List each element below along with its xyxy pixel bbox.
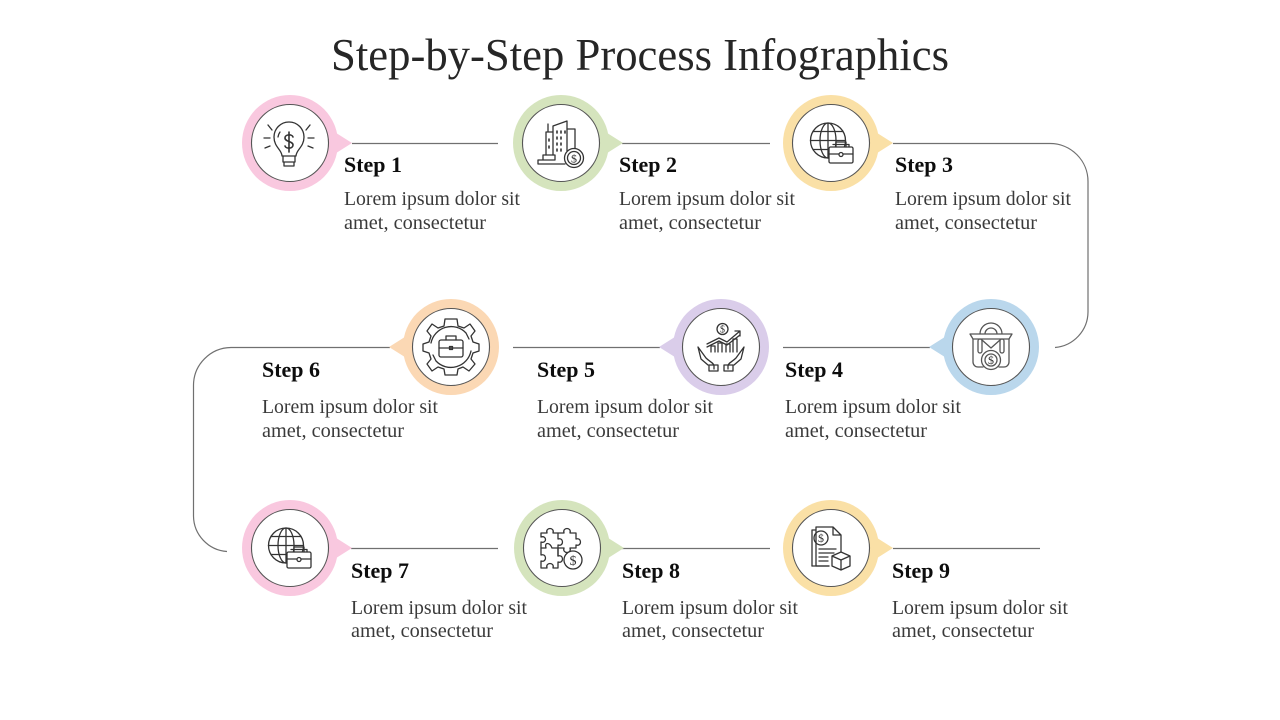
- step 2 text: amet, consectetur: [619, 212, 761, 234]
- icon: invoice with parcel box: $: [818, 531, 824, 545]
- step 8 marker: [514, 500, 624, 596]
- icon: gear with briefcase: [423, 319, 479, 375]
- step 7 text: Lorem ipsum dolor sit: [351, 597, 527, 619]
- icon: hands holding growth chart: $: [720, 324, 725, 336]
- icon: shopping bag with coin: $: [988, 353, 994, 367]
- step 4 text: amet, consectetur: [785, 420, 927, 442]
- connector: row 2 to row 3: [194, 348, 930, 552]
- step 2 heading: Step 2: [619, 152, 677, 177]
- step 8 text: Lorem ipsum dolor sit: [622, 597, 798, 619]
- icon: hands holding growth chart: [698, 324, 744, 371]
- step 2 marker: [513, 95, 623, 191]
- step 5 text: amet, consectetur: [537, 420, 679, 442]
- icon: office buildings with coin: [538, 121, 584, 168]
- step 9: [783, 500, 1068, 642]
- step 5 marker: [659, 299, 769, 395]
- step 6 text: amet, consectetur: [262, 420, 404, 442]
- step 1 marker: [242, 95, 352, 191]
- icon: globe and briefcase: [810, 123, 853, 163]
- connector: row 1 to row 2: [352, 144, 1088, 348]
- icon: puzzle pieces with coin: [541, 528, 582, 569]
- step 6 marker: [389, 299, 499, 395]
- step 9 text: amet, consectetur: [892, 620, 1034, 642]
- icon: puzzle pieces with coin: $: [570, 554, 576, 569]
- step 4: [785, 299, 1039, 442]
- step 5: [537, 299, 769, 442]
- step 7 marker: [242, 500, 352, 596]
- step 5 text: Lorem ipsum dolor sit: [537, 396, 713, 418]
- step 1: [242, 95, 520, 234]
- step 7: [242, 500, 527, 642]
- step 6 text: Lorem ipsum dolor sit: [262, 396, 438, 418]
- step 5 heading: Step 5: [537, 357, 595, 382]
- step 3 heading: Step 3: [895, 152, 953, 177]
- step 2 text: Lorem ipsum dolor sit: [619, 188, 795, 210]
- icon: globe and briefcase: [268, 528, 311, 568]
- step 4 marker: [929, 299, 1039, 395]
- step 4 heading: Step 4: [785, 357, 843, 382]
- step 3 marker: [783, 95, 893, 191]
- title: Step-by-Step Process Infographics: [331, 29, 949, 80]
- icon: invoice with parcel box: [812, 527, 850, 570]
- step 9 heading: Step 9: [892, 558, 950, 583]
- step 8 text: amet, consectetur: [622, 620, 764, 642]
- icon: office buildings with coin: $: [571, 152, 577, 166]
- icon: light bulb with dollar sign: [264, 122, 314, 166]
- step 9 marker: [783, 500, 893, 596]
- connector: row 3: [351, 548, 1040, 550]
- icon: shopping bag with coin: [970, 323, 1012, 370]
- step 8 heading: Step 8: [622, 558, 680, 583]
- step 2: [513, 95, 795, 234]
- step 3 text: amet, consectetur: [895, 212, 1037, 234]
- step 6: [262, 299, 499, 442]
- step 6 heading: Step 6: [262, 357, 320, 382]
- step 4 text: Lorem ipsum dolor sit: [785, 396, 961, 418]
- step 8: [514, 500, 798, 642]
- step 3 text: Lorem ipsum dolor sit: [895, 188, 1071, 210]
- step 1 heading: Step 1: [344, 152, 402, 177]
- step 7 text: amet, consectetur: [351, 620, 493, 642]
- step 1 text: Lorem ipsum dolor sit: [344, 188, 520, 210]
- step 9 text: Lorem ipsum dolor sit: [892, 597, 1068, 619]
- step 7 heading: Step 7: [351, 558, 409, 583]
- step 3: [783, 95, 1071, 234]
- step 1 text: amet, consectetur: [344, 212, 486, 234]
